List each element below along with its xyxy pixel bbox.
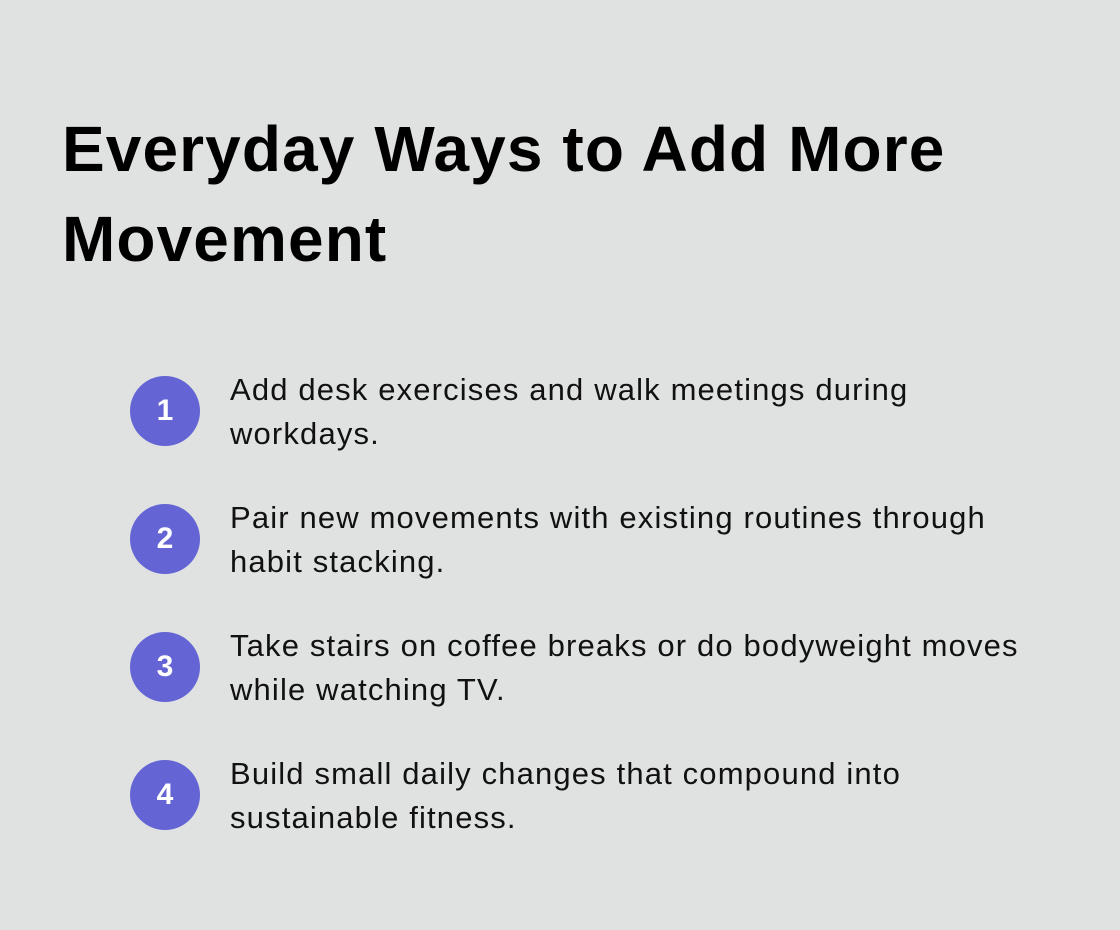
icon: number 3: 3	[157, 650, 173, 683]
text 3	[230, 628, 1019, 707]
icon: number 4: 4	[157, 778, 173, 811]
icon: number 2: 2	[157, 522, 173, 555]
list item 2	[130, 500, 986, 579]
text 4: sustainable fitness.	[230, 800, 517, 835]
text 2	[230, 500, 986, 579]
text 4: Build small daily changes that compound into	[230, 756, 901, 791]
list item 3	[130, 628, 1019, 707]
title: Movement	[62, 203, 387, 275]
list item 1	[130, 372, 908, 451]
icon: number 2	[130, 504, 200, 574]
title: Everyday Ways to Add More	[62, 113, 945, 185]
icon: number 3	[130, 632, 200, 702]
text 4	[230, 756, 901, 835]
icon: number 4	[130, 760, 200, 830]
list item 4	[130, 756, 901, 835]
text 1	[230, 372, 908, 451]
text 3: while watching TV.	[230, 672, 506, 707]
text 3: Take stairs on coffee breaks or do bodyweight moves	[230, 628, 1019, 663]
icon: number 1	[130, 376, 200, 446]
text 1: workdays.	[230, 416, 380, 451]
text 1: Add desk exercises and walk meetings during	[230, 372, 908, 407]
icon: number 1: 1	[157, 394, 173, 427]
text 2: habit stacking.	[230, 544, 445, 579]
title	[62, 113, 945, 275]
text 2: Pair new movements with existing routines through	[230, 500, 986, 535]
